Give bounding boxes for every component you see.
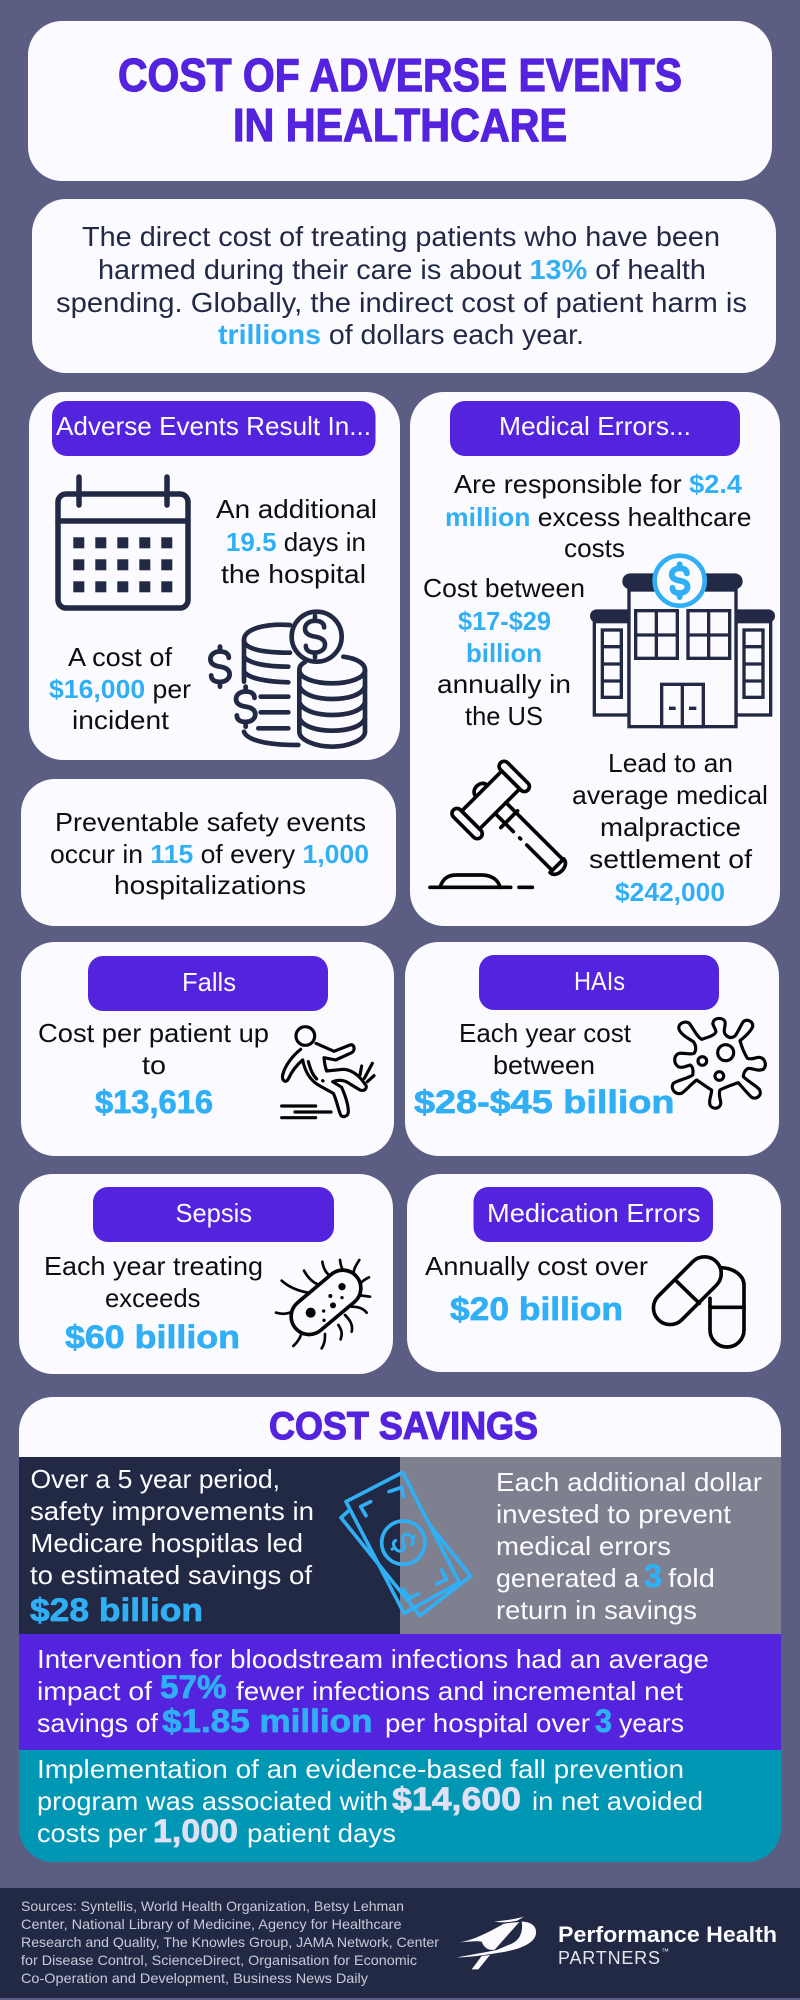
block: medicare savings: $28 billion: [30, 1592, 203, 1628]
text: annual cost: Cost between: [423, 573, 585, 603]
block: bloodstream infections: 57%: [160, 1669, 226, 1705]
text: cost per incident: incident: [72, 705, 170, 735]
heading pill: adverse events: [52, 401, 376, 456]
text: HAI cost: Each year cost: [459, 1018, 632, 1048]
text: excess costs: costs: [564, 533, 625, 563]
panel: medical errors: [410, 392, 780, 926]
text: cost per incident: A cost of: [68, 642, 173, 672]
text: preventable events: occur in 115 of every 1,000: [50, 839, 369, 869]
text: sepsis cost: Each year treating: [44, 1251, 263, 1281]
text: malpractice settlement: [572, 748, 768, 907]
text: annual cost: the US: [465, 701, 543, 731]
block: bloodstream infections: [19, 1634, 781, 1750]
text: additional days: 19.5 days in: [226, 527, 366, 557]
title: COST OF ADVERSE EVENTS: [118, 49, 682, 101]
block: medicare savings: Over a 5 year period,: [30, 1464, 280, 1494]
text: annual cost: [423, 573, 585, 731]
block: bloodstream infections: years: [619, 1708, 684, 1738]
panel: adverse events result in: [29, 392, 400, 760]
block: return on investment: Each additional dollar: [496, 1467, 762, 1497]
title: IN HEALTHCARE: [233, 99, 567, 151]
block: bloodstream infections: impact of: [37, 1676, 153, 1706]
intro text: harmed during their care is about 13% of health: [98, 254, 706, 285]
icon: calendar: [58, 477, 188, 608]
sources: Research and Quality, The Knowles Group, JAMA Network, Center: [21, 1934, 439, 1950]
heading pill: HAIs: [479, 955, 719, 1010]
logo: wordmark: ™: [661, 1947, 669, 1956]
panel: medication errors: [407, 1174, 781, 1372]
text: HAI cost: [414, 1018, 674, 1120]
block: return on investment: generated a: [496, 1563, 640, 1593]
block: fall prevention: $14,600: [392, 1781, 521, 1817]
text: additional days: An additional: [216, 494, 377, 524]
block: bloodstream infections: 3: [595, 1703, 612, 1739]
text: medication cost: Annually cost over: [425, 1251, 648, 1281]
text: sepsis cost: $60 billion: [65, 1319, 240, 1355]
panel: preventable safety events: [21, 779, 396, 926]
text: malpractice settlement: $242,000: [615, 877, 725, 907]
text: cost per incident: [49, 642, 191, 735]
heading pill: medical errors: [450, 401, 740, 456]
icon: person falling: [282, 1027, 374, 1118]
block: fall prevention: [19, 1750, 781, 1862]
text: excess costs: Are responsible for $2.4: [454, 469, 743, 499]
sources: Sources: Syntellis, World Health Organization, Betsy Lehman: [21, 1898, 404, 1914]
block: return on investment: fold: [668, 1563, 715, 1593]
text: annual cost: billion: [466, 638, 542, 668]
panel: HAIs: [405, 942, 779, 1156]
logo: Performance Health Partners mark: [457, 1917, 536, 1969]
icon: gavel: [430, 759, 589, 898]
text: preventable events: [50, 807, 369, 900]
panel: falls: [21, 942, 394, 1156]
block: return on investment: medical errors: [496, 1531, 671, 1561]
block: fall prevention: in net avoided: [532, 1786, 703, 1816]
text: malpractice settlement: malpractice: [600, 812, 741, 842]
block: return on investment: return in savings: [496, 1595, 697, 1625]
text: additional days: the hospital: [221, 559, 366, 589]
text: falls cost: [38, 1018, 269, 1120]
text: falls cost: Cost per patient up: [38, 1018, 269, 1048]
heading: cost savings: COST SAVINGS: [269, 1405, 538, 1448]
heading pill: medical errors: Medical Errors...: [499, 411, 691, 441]
icon: pills: [647, 1250, 744, 1347]
block: fall prevention: 1,000: [153, 1813, 238, 1849]
text: excess costs: [445, 469, 752, 563]
block: bloodstream infections: $1.85 million: [162, 1703, 372, 1739]
icon: coin stacks: [210, 612, 365, 747]
block: return on investment: 3: [644, 1558, 662, 1594]
text: HAI cost: $28-$45 billion: [414, 1084, 674, 1120]
heading pill: falls: [88, 956, 328, 1011]
logo: wordmark: [558, 1922, 777, 1968]
text: excess costs: million excess healthcare: [445, 502, 752, 532]
text: annual cost: annually in: [437, 669, 571, 699]
text: sepsis cost: exceeds: [105, 1283, 200, 1313]
block: medicare savings: to estimated savings of: [30, 1560, 313, 1590]
block: fall prevention: program was associated with: [37, 1786, 388, 1816]
text: preventable events: hospitalizations: [114, 870, 306, 900]
sources: [21, 1898, 439, 1986]
sources: for Disease Control, ScienceDirect, Organisation for Economic: [21, 1952, 417, 1968]
block: medicare savings: safety improvements in: [30, 1496, 314, 1526]
heading pill: sepsis: [93, 1187, 334, 1242]
text: preventable events: Preventable safety events: [55, 807, 366, 837]
text: HAI cost: between: [493, 1050, 595, 1080]
heading pill: medication errors: [474, 1187, 713, 1242]
logo: wordmark: Performance Health: [558, 1922, 777, 1947]
panel: sepsis: [19, 1174, 393, 1374]
block: fall prevention: patient days: [247, 1818, 396, 1848]
panel: title: [28, 21, 772, 181]
block: return on investment: invested to prevent: [496, 1499, 732, 1529]
panel: cost savings: [19, 1397, 781, 1862]
block: bloodstream infections: fewer infections and incremental net: [236, 1676, 684, 1706]
block: medicare savings: Medicare hospitlas led: [30, 1528, 303, 1558]
heading pill: HAIs: HAIs: [574, 966, 625, 996]
text: cost per incident: $16,000 per: [49, 674, 191, 704]
logo: wordmark: PARTNERS: [558, 1948, 660, 1968]
block: bloodstream infections: per hospital over: [385, 1708, 590, 1738]
text: medication cost: [425, 1251, 648, 1327]
text: additional days: [216, 494, 377, 589]
panel: introduction: [32, 199, 776, 373]
block: medicare savings: [19, 1457, 400, 1634]
heading pill: adverse events: Adverse Events Result In...: [56, 411, 371, 441]
block: return on investment: [400, 1457, 781, 1634]
text: sepsis cost: [44, 1251, 263, 1355]
icon: dollar bills: [341, 1472, 471, 1616]
block: fall prevention: Implementation of an evidence-based fall prevention: [37, 1754, 684, 1784]
text: annual cost: $17-$29: [458, 606, 551, 636]
block: fall prevention: costs per: [37, 1818, 147, 1848]
icon: hospital building: [590, 556, 775, 727]
intro text: The direct cost of treating patients who have been: [82, 221, 720, 252]
block: bloodstream infections: Intervention for bloodstream infections had an average: [37, 1644, 709, 1674]
title: [118, 49, 682, 151]
text: malpractice settlement: Lead to an: [608, 748, 733, 778]
text: falls cost: to: [142, 1050, 166, 1080]
intro text: trillions of dollars each year.: [218, 319, 584, 350]
text: malpractice settlement: average medical: [572, 780, 768, 810]
sources: Center, National Library of Medicine, Agency for Healthcare: [21, 1916, 402, 1932]
heading pill: medication errors: Medication Errors: [487, 1198, 700, 1228]
sources: Co-Operation and Development, Business News Daily: [21, 1970, 368, 1986]
text: falls cost: $13,616: [95, 1084, 213, 1120]
text: medication cost: $20 billion: [450, 1291, 623, 1327]
intro text: spending. Globally, the indirect cost of patient harm is: [56, 287, 747, 318]
text: malpractice settlement: settlement of: [589, 844, 753, 874]
icon: virus: [672, 1018, 765, 1108]
footer: [0, 1888, 800, 1998]
heading pill: falls: Falls: [182, 967, 236, 997]
heading: cost savings: [19, 1397, 781, 1457]
heading pill: sepsis: Sepsis: [176, 1198, 252, 1228]
icon: bacterium: [276, 1260, 370, 1348]
block: bloodstream infections: savings of: [37, 1708, 159, 1738]
intro text: [56, 221, 747, 350]
